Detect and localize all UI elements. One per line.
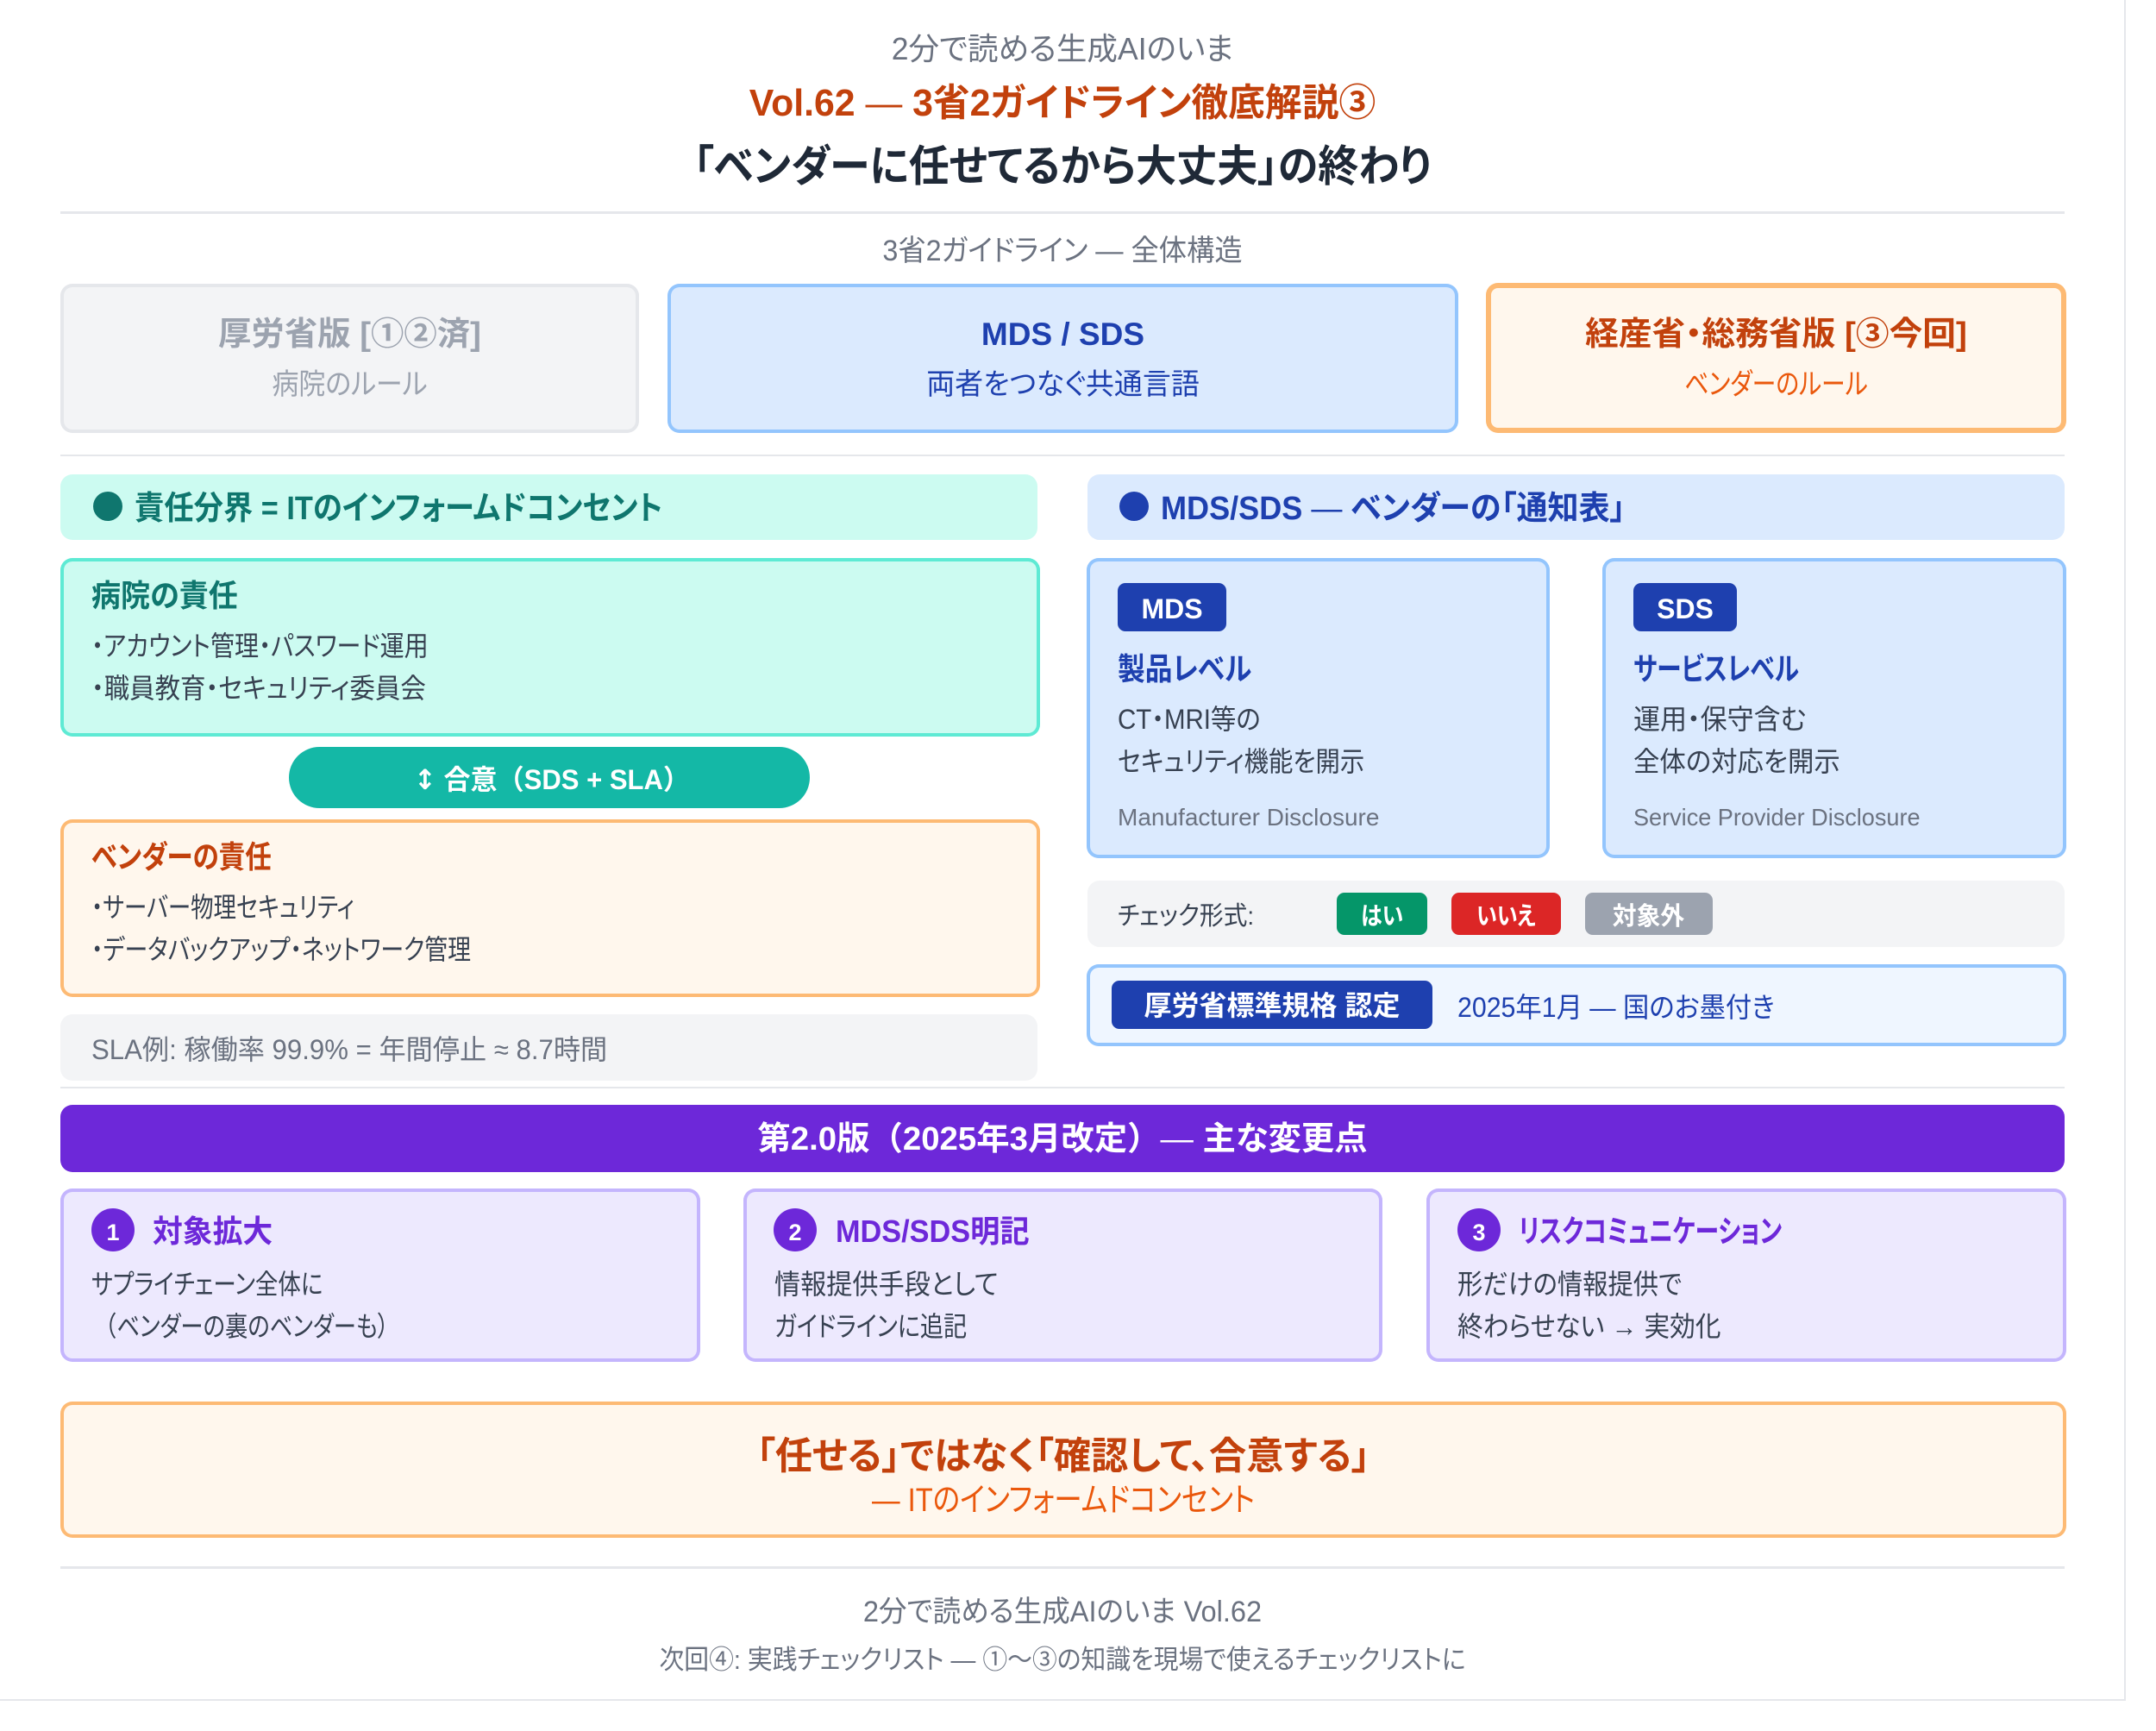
card heading: 厚労省版 [①②済] [218,317,481,353]
callout subline: — ITのインフォームドコンセント [872,1483,1255,1519]
agreement pill [289,747,810,808]
card caption: Manufacturer Disclosure [1118,804,1379,831]
SDS badge: SDS [1657,593,1714,624]
number badge: 1 [106,1220,120,1245]
panel: hospital responsibility [60,558,1040,737]
number badge: 2 [788,1220,802,1245]
heading text: MDS/SDS — ベンダーの「通知表」 [1161,491,1626,527]
pill: yes [1337,893,1427,935]
pill: no [1451,893,1561,935]
section heading: responsibility [60,474,1037,540]
panel: change 3 [1426,1188,2066,1362]
change heading: リスクコミュニケーション [1519,1214,1782,1249]
pill: not applicable [1585,893,1713,935]
pill: yes: はい [1361,903,1403,931]
SLA example [60,1014,1037,1081]
card subtext: 病院のルール [272,368,428,401]
panel: MDS card [1087,558,1550,858]
section heading: MDS/SDS [1087,474,2065,540]
structure label: 3省2ガイドライン — 全体構造 [882,235,1243,267]
panel: change 2 [743,1188,1382,1362]
number badge [91,1208,135,1251]
card text: 全体の対応を開示 [1633,746,1840,777]
panel: vendor responsibility [60,819,1040,997]
footer series line: 2分で読める生成AIのいま Vol.62 [863,1596,1262,1628]
panel heading: ベンダーの責任 [91,839,272,875]
change text: 情報提供手段として [774,1269,999,1300]
list item: ・データバックアップ・ネットワーク管理 [91,934,471,965]
series title: 2分で読める生成AIのいま [892,31,1233,66]
check format row [1087,881,2065,947]
card heading: サービスレベル [1633,651,1799,687]
panel: MHLW guideline [60,284,639,433]
card heading: 製品レベル [1118,651,1251,687]
number badge [774,1208,817,1251]
number badge: 3 [1472,1220,1486,1245]
change text: ガイドラインに追記 [774,1311,967,1342]
banner text: 第2.0版（2025年3月改定）— 主な変更点 [757,1121,1368,1157]
callout: key message [60,1402,2066,1538]
certification badge: 厚労省標準規格 認定 [1144,990,1400,1021]
row label: チェック形式: [1118,902,1254,931]
main title: 「ベンダーに任せてるから大丈夫」の終わり [693,142,1432,191]
SDS badge [1633,583,1737,631]
list item: ・アカウント管理・パスワード運用 [91,630,429,662]
panel: MDS / SDS [667,284,1458,433]
change text: サプライチェーン全体に [91,1269,323,1300]
panel: SDS card [1602,558,2066,858]
change text: 形だけの情報提供で [1457,1269,1682,1300]
icon: blue dot [1119,492,1149,521]
pill text: ↕ 合意（SDS + SLA） [414,763,690,796]
MDS badge [1118,583,1226,631]
change heading: 対象拡大 [153,1214,273,1249]
heading text: 責任分界 = ITのインフォームドコンセント [135,491,662,527]
MDS badge: MDS [1141,593,1203,624]
panel: change 1 [60,1188,700,1362]
change text: （ベンダーの裏のベンダーも） [94,1311,389,1342]
banner: version 2.0 changes [60,1105,2065,1172]
volume title: Vol.62 — 3省2ガイドライン徹底解説③ [749,82,1376,124]
card text: 運用・保守含む [1633,704,1806,735]
change heading: MDS/SDS明記 [836,1214,1030,1249]
number badge [1457,1208,1501,1251]
certification text: 2025年1月 — 国のお墨付き [1457,992,1775,1023]
card text: CT・MRI等の [1118,704,1261,735]
card heading: MDS / SDS [981,317,1144,352]
panel: METI and MIC guideline [1486,283,2066,433]
SLA text: SLA例: 稼働率 99.9% = 年間停止 ≈ 8.7時間 [91,1034,607,1065]
card subtext: 両者をつなぐ共通言語 [926,368,1200,401]
icon: teal dot [93,492,122,521]
card subtext: ベンダーのルール [1684,368,1868,401]
panel heading: 病院の責任 [91,578,238,613]
pill: no: いいえ [1476,903,1536,931]
certification badge [1112,981,1432,1029]
card caption: Service Provider Disclosure [1633,804,1921,831]
list item: ・職員教育・セキュリティ委員会 [91,673,426,704]
card text: セキュリティ機能を開示 [1118,746,1364,777]
callout headline: 「任せる」ではなく「確認して、合意する」 [756,1435,1370,1477]
change text: 終わらせない → 実効化 [1457,1311,1721,1342]
certification panel [1087,964,2066,1046]
list item: ・サーバー物理セキュリティ [91,892,354,923]
card heading: 経産省・総務省版 [③今回] [1585,317,1967,353]
pill: not applicable: 対象外 [1613,903,1685,931]
footer next issue line: 次回④: 実践チェックリスト — ①〜③の知識を現場で使えるチェックリストに [659,1645,1466,1675]
